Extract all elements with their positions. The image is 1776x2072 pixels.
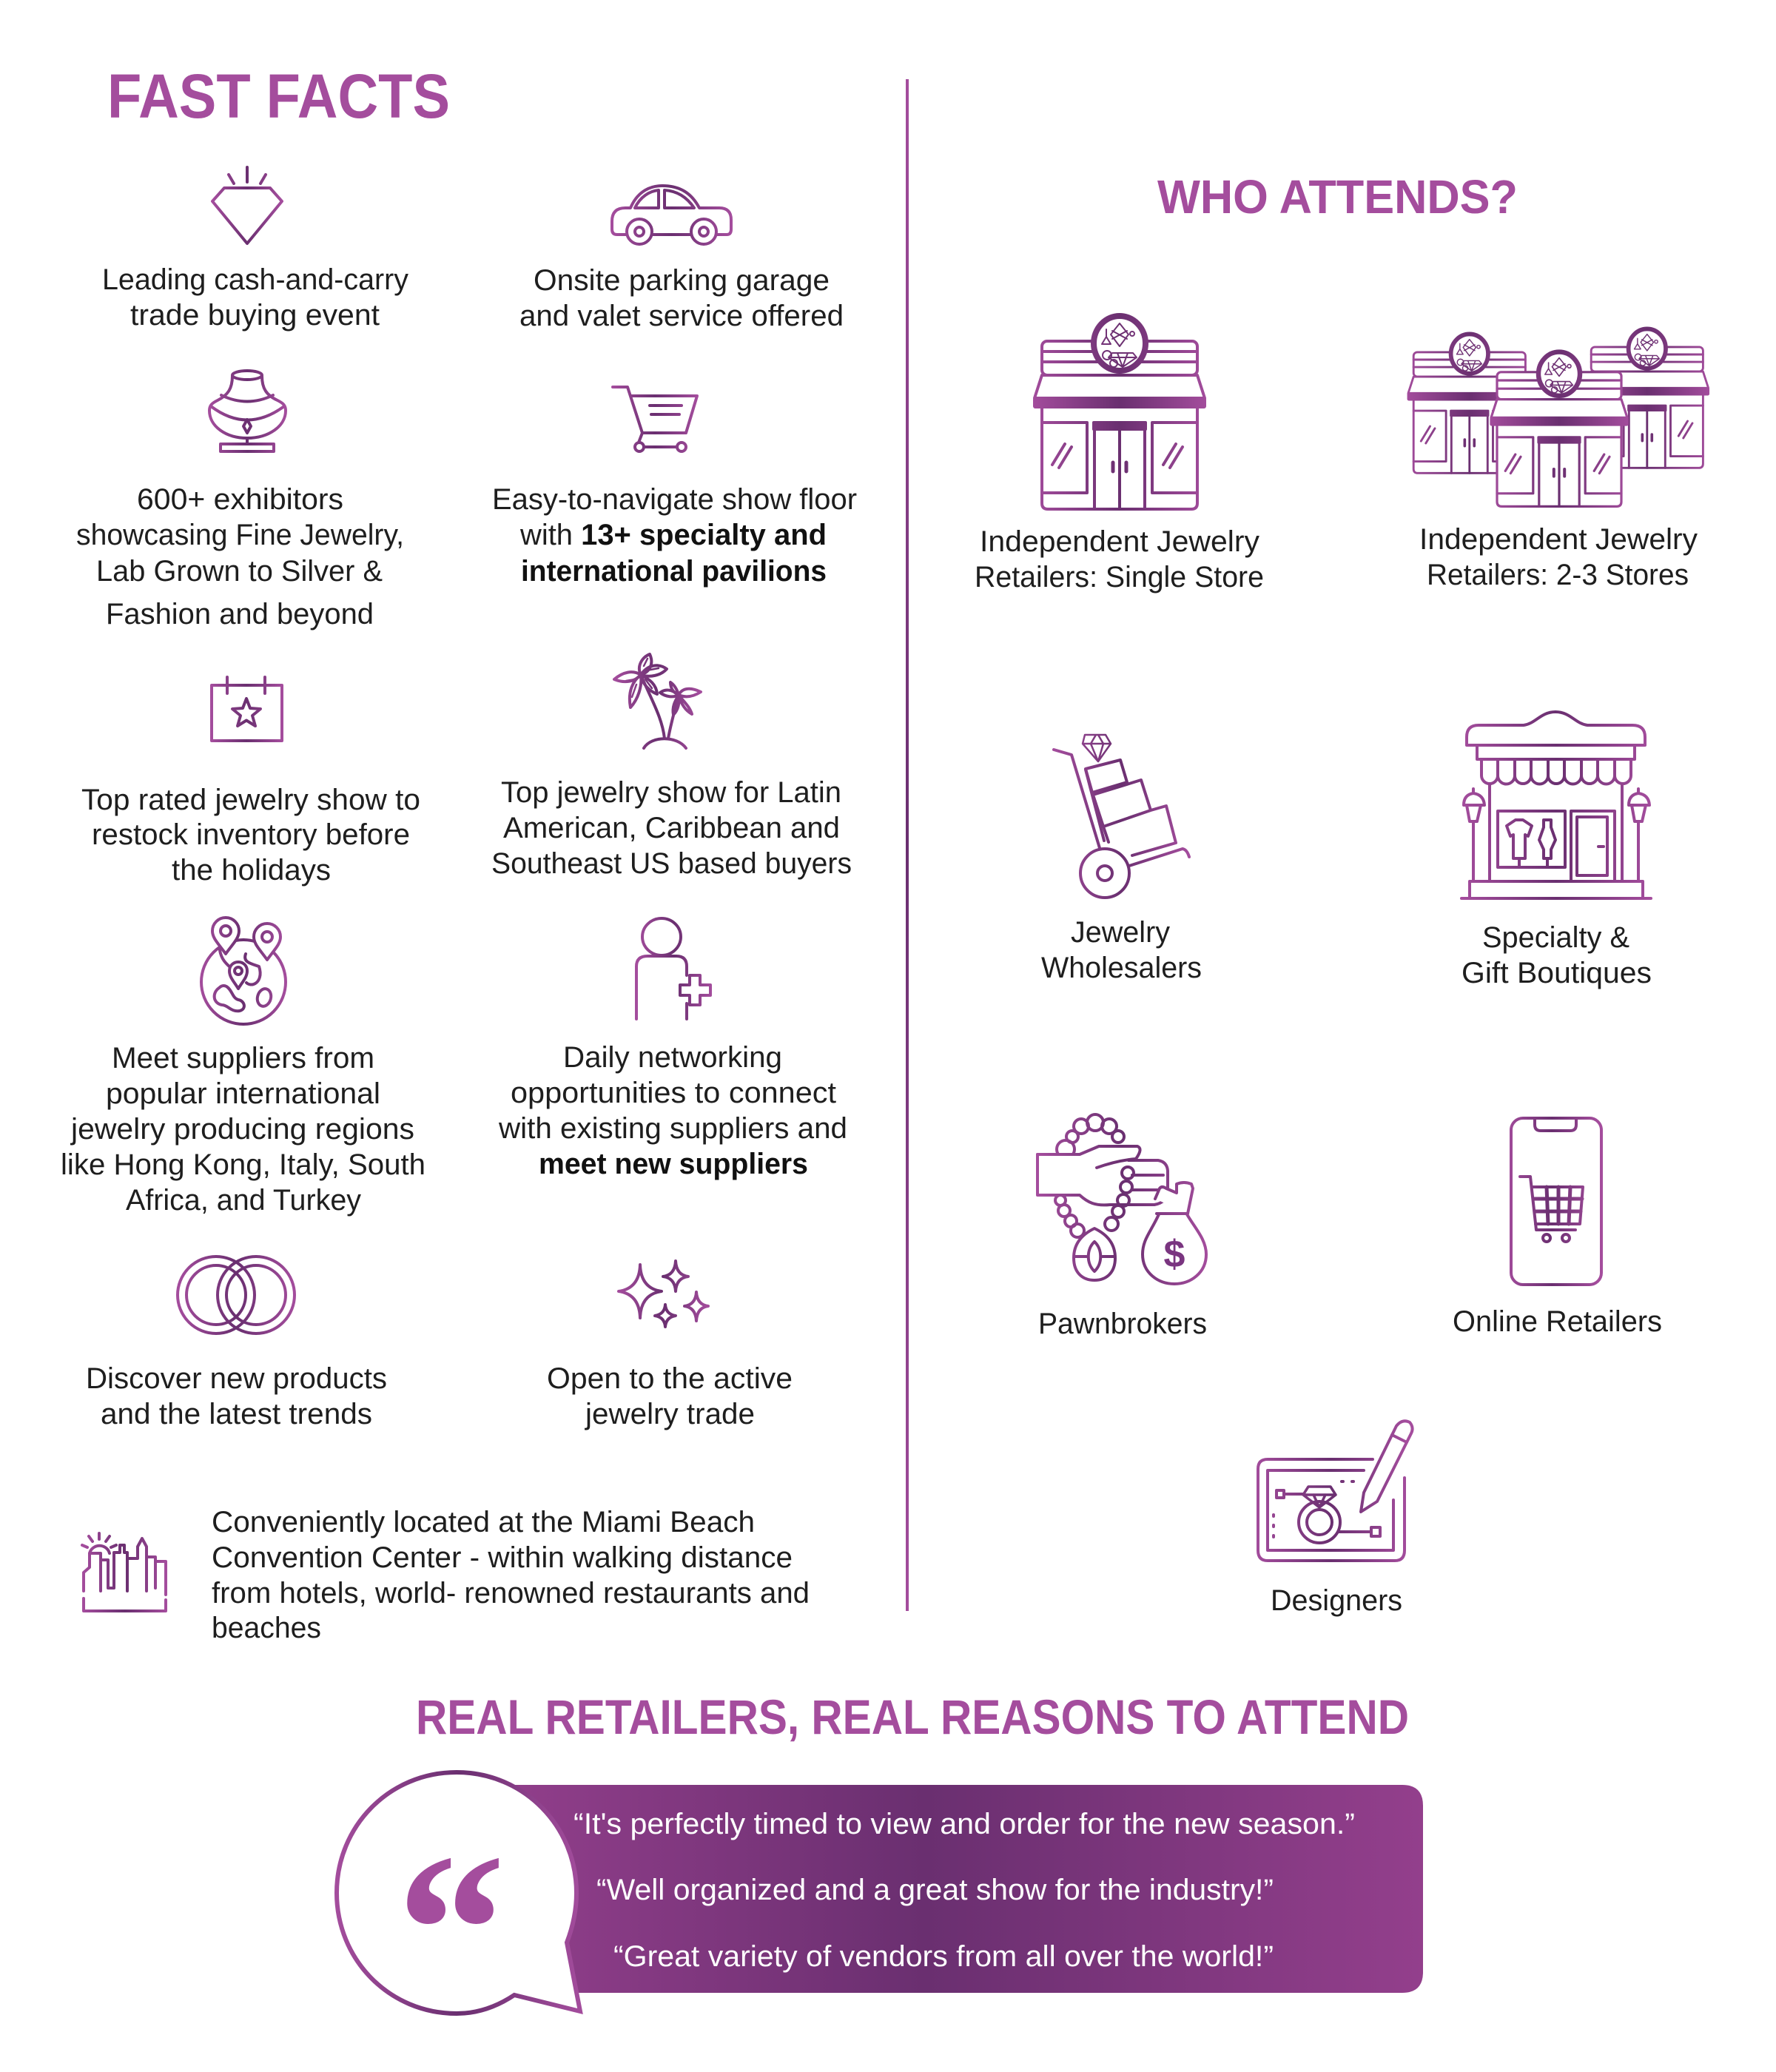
attendee: boutiques (1462, 712, 1652, 989)
fact: networking (498, 918, 847, 1180)
text: miami beach location: from hotels, world- renowned restaurants and (212, 1577, 810, 1610)
icon: globe with pins (201, 918, 286, 1024)
label: multiple stores: Independent Jewelry (1419, 523, 1698, 556)
text: leading cash-and-carry: trade buying event (130, 299, 380, 332)
fact: exhibitors (76, 371, 404, 630)
label: single store (975, 525, 1264, 593)
label: online retailers: Online Retailers (1453, 1305, 1662, 1338)
icon: hand with beads and money bag (1037, 1114, 1206, 1284)
icon: shopping cart (613, 387, 697, 451)
text: top rated: restock inventory before (92, 818, 410, 851)
text: new products (86, 1362, 387, 1430)
icon: three storefronts (1407, 329, 1709, 506)
attendee: single store (975, 316, 1264, 593)
text: international suppliers: Meet suppliers from (112, 1042, 374, 1074)
icon: hand with beads and money bag: $ (1164, 1233, 1185, 1276)
text: top rated (81, 784, 420, 887)
attendee: multiple stores (1407, 329, 1709, 591)
divider line (906, 79, 909, 1611)
text: latin american buyers: Top jewelry show for Latin (501, 776, 841, 809)
text: new products: Discover new products (86, 1362, 387, 1395)
text: miami beach location (212, 1506, 810, 1644)
text: show floor: international pavilions (521, 555, 827, 588)
quote lines: “It's perfectly timed to view and order for the new season.” (574, 1808, 1355, 1840)
fact: parking (519, 186, 844, 332)
attendee: designers (1258, 1421, 1413, 1617)
text: exhibitors: Fashion and beyond (106, 598, 374, 630)
icon: hand truck with boxes (1054, 735, 1189, 898)
text: top rated: the holidays (172, 854, 331, 887)
fact: top rated (81, 677, 420, 887)
text: show floor: Easy-to-navigate show floor (492, 483, 857, 516)
attendee: wholesalers (1041, 735, 1202, 984)
text: parking (519, 264, 844, 332)
text: networking (498, 1041, 847, 1180)
text: international suppliers: jewelry producing regions (70, 1113, 414, 1146)
text: latin american buyers (491, 776, 852, 880)
label: boutiques (1462, 921, 1652, 989)
banner background (485, 1785, 1423, 1993)
icon: car (612, 186, 731, 244)
text: open to trade (547, 1362, 793, 1430)
fact: international suppliers (61, 918, 426, 1217)
fact: new products (86, 1257, 387, 1430)
label: wholesalers: Wholesalers (1041, 952, 1202, 984)
attendee: online retailers (1453, 1118, 1662, 1338)
icon: interlocked rings (178, 1257, 295, 1333)
fact: miami beach location (82, 1506, 810, 1644)
fact: show floor (492, 387, 857, 588)
icon: sparkles (619, 1261, 708, 1327)
fact: open to trade (547, 1261, 793, 1430)
icon: single storefront (1033, 316, 1206, 509)
label: multiple stores: Retailers: 2-3 Stores (1427, 559, 1689, 591)
testimonial panel (337, 1772, 1423, 2051)
label: boutiques: Gift Boutiques (1462, 957, 1652, 989)
attendee: pawnbrokers (1037, 1114, 1207, 1340)
label: wholesalers: Jewelry (1071, 916, 1170, 949)
icon: boutique storefront (1462, 712, 1651, 898)
text: exhibitors: 600+ exhibitors (137, 483, 343, 516)
text: international suppliers: like Hong Kong, Italy, South (61, 1148, 426, 1181)
text: top rated: Top rated jewelry show to (81, 784, 420, 816)
label: wholesalers (1041, 916, 1202, 984)
text: leading cash-and-carry: Leading cash-and-carry (102, 263, 408, 296)
text: parking: Onsite parking garage (534, 264, 830, 297)
text: exhibitors: showcasing Fine Jewelry, (76, 519, 404, 551)
icon: phone with cart (1511, 1118, 1601, 1285)
text: international suppliers: Africa, and Turkey (126, 1184, 361, 1217)
fact: latin american buyers (491, 654, 852, 880)
quote lines (574, 1808, 1355, 1973)
text: networking: with existing suppliers and (498, 1112, 847, 1145)
label: pawnbrokers: Pawnbrokers (1038, 1308, 1207, 1340)
text: miami beach location: Conveniently located at the Miami Beach (212, 1506, 755, 1538)
text: miami beach location: Convention Center - within walking distance (212, 1541, 793, 1574)
icon: necklace bust (209, 371, 286, 451)
heading: who attends: WHO ATTENDS? (1157, 170, 1518, 223)
label: multiple stores (1419, 523, 1698, 591)
text: open to trade: Open to the active (547, 1362, 793, 1395)
text: international suppliers (61, 1042, 426, 1217)
icon: diamond (212, 167, 282, 243)
label: single store: Retailers: Single Store (975, 561, 1264, 593)
quote mark: “ (397, 1809, 506, 2051)
quote lines: “Well organized and a great show for the industry!” (596, 1874, 1274, 1906)
title: fast facts: FAST FACTS (107, 61, 450, 131)
text: new products: and the latest trends (101, 1398, 372, 1430)
text: international suppliers: popular international (106, 1077, 380, 1110)
fact: leading cash-and-carry (102, 167, 408, 332)
label: single store: Independent Jewelry (980, 525, 1259, 558)
icon: palm trees (614, 654, 701, 748)
text: miami beach location: beaches (212, 1612, 321, 1644)
heading: real retailers: REAL RETAILERS, REAL REASONS TO ATTEND (416, 1689, 1409, 1744)
text: open to trade: jewelry trade (585, 1398, 755, 1430)
text: exhibitors: Lab Grown to Silver & (96, 555, 383, 588)
text: exhibitors (76, 483, 404, 630)
text: show floor: with 13+ specialty and (519, 519, 827, 551)
text: latin american buyers: American, Caribbean and (503, 812, 840, 844)
text: leading cash-and-carry (102, 263, 408, 332)
icon: person with plus (636, 918, 710, 1019)
text: show floor (492, 483, 857, 588)
label: designers: Designers (1271, 1584, 1402, 1617)
text: networking: Daily networking (563, 1041, 782, 1074)
icon: city skyline (82, 1533, 166, 1611)
icon: drawing tablet with ring (1258, 1421, 1413, 1561)
text: networking: meet new suppliers (539, 1148, 808, 1180)
text: latin american buyers: Southeast US based buyers (491, 847, 852, 880)
icon: calendar star (212, 677, 282, 741)
text: parking: and valet service offered (519, 300, 844, 332)
quote lines: “Great variety of vendors from all over the world!” (613, 1940, 1274, 1973)
label: boutiques: Specialty & (1482, 921, 1629, 954)
speech bubble (337, 1772, 580, 2014)
text: networking: opportunities to connect (511, 1077, 836, 1109)
